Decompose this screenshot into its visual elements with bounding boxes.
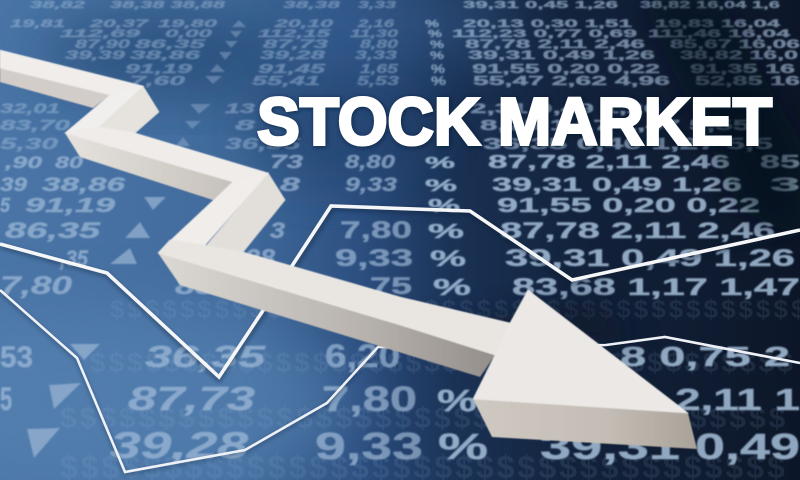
ticker numbers: right columns: 85,67 16,06 (670, 37, 800, 51)
ticker numbers: left columns: 20,10 (273, 18, 335, 30)
ticker numbers: right columns: % (433, 274, 471, 300)
ticker numbers: left columns: 80 (55, 153, 84, 172)
ticker numbers: right columns: 83,68 1,17 1,47 (512, 274, 800, 301)
ticker numbers: right columns: 0,49 (695, 426, 800, 467)
ticker numbers: right columns: % (431, 74, 446, 88)
ticker numbers: left columns: 7,80 (340, 217, 412, 244)
ticker numbers: left columns: 20,37 (88, 18, 150, 30)
ticker numbers: left columns: 55,41 (252, 73, 320, 88)
ticker numbers: right columns: % (425, 19, 439, 30)
ticker numbers: left columns: 2,16 (356, 18, 395, 30)
ticker numbers: right columns: % (430, 50, 444, 62)
ticker numbers: right columns: 19,83 16,04 (655, 18, 782, 30)
ticker numbers: right columns: 87,78 2,11 2,46 (488, 152, 730, 172)
ticker numbers: right columns: 91,35 16 (690, 61, 795, 76)
ticker numbers: right columns: 8,25 1,17 1,47 5,55 (480, 117, 750, 134)
ticker numbers: right columns: % (430, 39, 444, 51)
ticker numbers: left columns: 5 (0, 195, 11, 217)
ticker numbers: right columns: % (425, 155, 455, 172)
ticker triangles (27, 20, 246, 458)
ticker numbers: left columns: 86,35 (5, 218, 101, 243)
downward 3D arrow (0, 50, 697, 449)
ticker numbers: left columns: 75 (370, 273, 412, 300)
ticker numbers: left columns: 86,35 (135, 37, 206, 51)
ticker numbers: right columns: 39,31 0,49 1,26 (468, 48, 656, 62)
ticker numbers: right columns: % (428, 29, 442, 40)
ticker numbers: left columns: 38,38 38,88 (110, 0, 226, 11)
ticker numbers: left columns: 8 (235, 117, 257, 134)
ticker numbers: left columns: 9,33 (315, 426, 423, 468)
ticker numbers: left columns: 1,65 (360, 61, 399, 76)
ticker numbers: right columns: 87,78 2,11 2,46 (500, 218, 775, 243)
ticker numbers: right columns (425, 0, 800, 467)
ticker numbers: right columns: 36,35 0,40 1,27 5,5 (483, 136, 773, 153)
ticker numbers: left columns: 5 (0, 381, 12, 417)
ticker numbers: right columns: 8 0,75 2 (620, 341, 790, 372)
ticker numbers: left columns: 32,01 (0, 100, 60, 116)
ticker numbers: left columns: 38,38 (283, 0, 341, 11)
ticker numbers: left columns: 7,80 (322, 380, 417, 419)
ticker numbers: right columns: 20,13 0,30 1,51 (463, 18, 632, 30)
ticker numbers: left columns: 83,70 (0, 117, 71, 134)
ticker numbers: left columns: 112,69 (60, 28, 142, 40)
ticker numbers: left columns: 9,33 (345, 175, 398, 196)
ticker numbers: right columns: % (437, 383, 477, 418)
ticker numbers: right columns: 3 (770, 175, 800, 196)
ticker numbers: left columns: 0,00 (165, 28, 214, 40)
ticker numbers: right columns: % (438, 426, 488, 467)
ticker numbers: left columns: 11,30 (350, 28, 400, 40)
ticker numbers: right columns: % (425, 176, 457, 195)
ticker numbers: right columns: 87,78 2,11 2,46 (465, 37, 646, 51)
ticker numbers: right columns: 39,31 (540, 426, 680, 467)
ticker numbers: left columns: 8,80 (345, 152, 395, 172)
dark diagonal shadow (400, 0, 800, 345)
title: STOCK MARKET (257, 84, 772, 160)
ticker numbers: left columns: 39,28 (110, 425, 249, 466)
ticker numbers: left columns: 91,19 (25, 195, 117, 217)
faint dollar sign pattern (60, 294, 800, 480)
ticker numbers: left columns: 8,80 (360, 37, 399, 51)
ticker numbers: left columns: 3,33 (355, 48, 398, 62)
ticker numbers: left columns: 13 (225, 100, 255, 116)
ticker numbers: left columns: 87,73 (128, 380, 255, 417)
chart line: lower (0, 290, 800, 474)
faint dollar sign pattern: $$$$$$$$$$$$$$$$$$$$$$$$$$$$$$$$$$$$$$ (90, 347, 796, 378)
ticker numbers: left columns: 39 (0, 175, 28, 196)
ticker numbers: right columns: % (428, 221, 464, 243)
ticker numbers: left columns: 7,80 (0, 272, 72, 300)
chart line: upper (0, 206, 800, 380)
ticker numbers: left columns: 73 (270, 152, 303, 172)
ticker numbers: left columns: 53 (0, 341, 33, 374)
ticker numbers: left columns: 36,35 (145, 339, 266, 374)
ticker numbers: right columns: 111,46 16,04 (648, 28, 792, 40)
ticker numbers: left columns: 91,45 (258, 61, 327, 76)
ticker numbers: right columns: % (428, 196, 460, 216)
ticker numbers: left columns: 19,81 (10, 18, 65, 30)
ticker numbers: right columns: 112,23 0,77 0,69 (452, 28, 637, 40)
ticker numbers: left columns: 87,90 (75, 37, 131, 51)
ticker numbers: right columns: 85 (760, 152, 800, 172)
ticker numbers: left columns: 91,19 (125, 61, 194, 76)
ticker numbers: right columns: 39,31 0,49 1,26 (492, 175, 742, 196)
ticker numbers: left columns (0, 0, 423, 468)
ticker numbers: left columns: 39,28 (260, 48, 326, 62)
ticker numbers: right columns: 2,31 0,49 1,26 (470, 100, 660, 116)
ticker numbers: left columns: 112,15 (258, 28, 332, 40)
ticker numbers: right columns: 38,82 16,0 (680, 48, 799, 62)
ticker numbers: left columns: 38,86 (130, 48, 201, 62)
ticker numbers: right columns: % (430, 246, 466, 271)
ticker numbers: left columns: ,90 (3, 153, 43, 172)
ticker numbers: right columns: 39,31 0,45 1,26 (463, 0, 619, 11)
ticker numbers: right columns: % (431, 62, 445, 76)
ticker numbers: left columns: 5,30 (0, 136, 58, 153)
ticker numbers: left columns: 9,33 (335, 245, 413, 272)
ticker numbers: left columns: 87,73 (263, 37, 329, 51)
ticker numbers: left columns: 38,82 (30, 0, 86, 11)
ticker numbers: left columns: ,35 (59, 246, 89, 271)
ticker numbers: right columns: 91,55 0,20 0,22 (472, 61, 660, 76)
ticker numbers: left columns: 28 (244, 245, 276, 272)
ticker numbers: left columns: 38,86 (42, 175, 126, 196)
ticker numbers: left columns: 3,33 (358, 0, 397, 11)
ticker numbers: right columns: 39,31 0,49 1,26 (505, 245, 795, 272)
ticker numbers: left columns: 36,35 (225, 136, 302, 153)
ticker numbers: right columns: 91,55 0,20 0,22 (497, 195, 760, 217)
ticker numbers: left columns: 8 (280, 175, 301, 196)
ticker numbers: left columns: 19,80 (158, 18, 219, 30)
faint dollar sign pattern: $$$$$$$$$$$$$$$$$$$$$$$$$$$$$$$$$$$$$ (60, 402, 788, 435)
ticker numbers: left columns: 5,53 (357, 73, 400, 88)
ticker numbers: left columns: 7,60 (130, 73, 187, 88)
ticker numbers: right columns: 52,85 16 (695, 73, 800, 88)
ticker numbers: left columns: 39,39 (65, 48, 126, 62)
ticker numbers: left columns: 6,20 (325, 338, 400, 374)
ticker numbers: right columns: 55,47 2,62 4,96 (473, 73, 670, 88)
ticker numbers: left columns: 83 (175, 273, 216, 300)
ticker numbers: right columns: 38,82 16,04 1,6 (640, 0, 781, 11)
ticker numbers: right columns: 2,11 1 (675, 382, 800, 417)
ticker numbers: left columns: 3 (270, 218, 285, 243)
